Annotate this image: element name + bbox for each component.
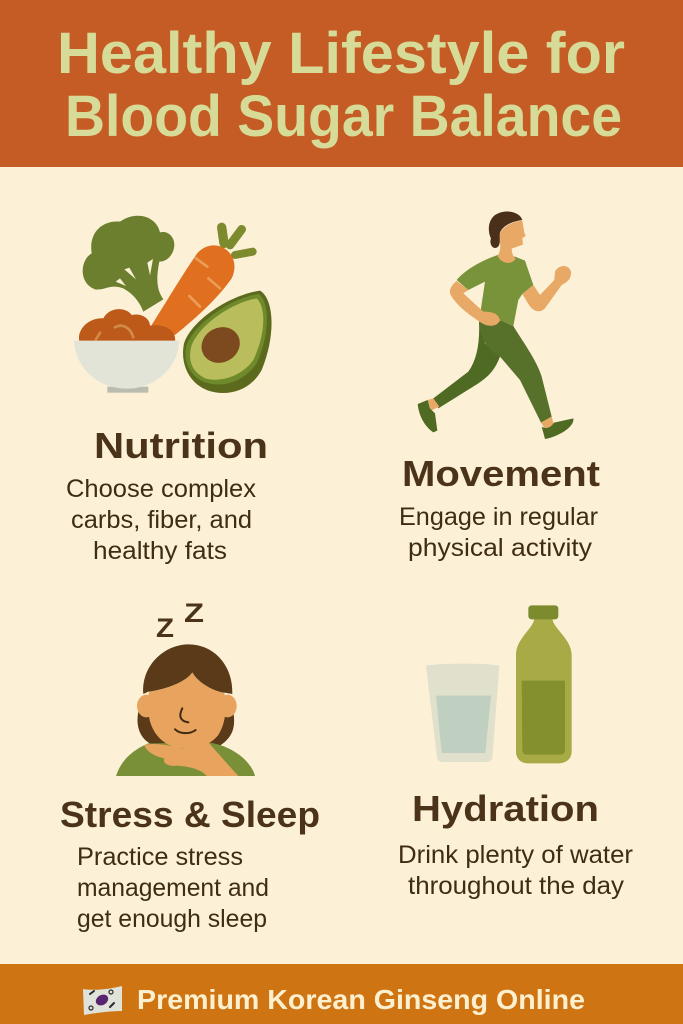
- nose and mouth: [175, 708, 196, 733]
- hair: [489, 211, 522, 248]
- shirt: [457, 255, 533, 326]
- text: Stress & Sleep description: Practice stress: [77, 843, 243, 871]
- icon: sleeping person: [116, 644, 255, 776]
- title banner: [0, 0, 683, 167]
- text: Nutrition description: carbs, fiber, and: [71, 506, 252, 534]
- shoes: [418, 400, 573, 439]
- title: [57, 21, 625, 149]
- icon: healthy food: [74, 216, 272, 393]
- heading: Hydration: Hydration: [412, 788, 599, 829]
- text: Nutrition description: Choose complex: [66, 475, 256, 503]
- heading: Nutrition: Nutrition: [94, 425, 268, 466]
- back arm: [450, 281, 500, 326]
- footer banner: [0, 964, 683, 1024]
- avocado: [183, 291, 272, 393]
- text: Hydration description: [398, 841, 633, 900]
- icon: Korean flag: [83, 986, 122, 1015]
- neck and face: [498, 221, 526, 263]
- text: Movement description: physical activity: [408, 534, 593, 562]
- front leg: [479, 321, 552, 423]
- shoulders: [116, 743, 255, 776]
- broccoli: [83, 216, 174, 312]
- text: Movement description: Engage in regular: [399, 503, 598, 531]
- forward arm: [522, 266, 571, 311]
- sleep letters: Z: [184, 598, 204, 628]
- glass: [426, 664, 499, 762]
- text: Nutrition description: healthy fats: [93, 537, 227, 565]
- ankles: [428, 398, 554, 429]
- carrot: [151, 227, 253, 335]
- icon: water glass and bottle: [426, 605, 572, 763]
- title: Blood Sugar Balance: [65, 84, 622, 149]
- hand: [144, 742, 238, 776]
- heading: Movement: Movement: [402, 453, 600, 494]
- back hair: [137, 712, 234, 746]
- ears: [137, 695, 237, 717]
- brown food: [79, 309, 175, 341]
- bottle: [516, 605, 572, 763]
- heading: Stress & Sleep: Stress & Sleep: [60, 794, 320, 835]
- bowl: [74, 341, 179, 393]
- face: [148, 672, 226, 749]
- sleep letters: Z: [156, 613, 174, 643]
- text: Hydration description: throughout the day: [408, 872, 625, 900]
- text: Stress & Sleep description: management and: [77, 874, 269, 902]
- text: Stress & Sleep description: get enough sleep: [77, 905, 267, 933]
- text: Hydration description: Drink plenty of water: [398, 841, 633, 869]
- back leg: [433, 322, 500, 408]
- text: Movement description: [399, 503, 598, 562]
- title: Healthy Lifestyle for: [57, 21, 625, 86]
- sleep letters: [156, 598, 204, 643]
- icon: runner: [418, 211, 573, 439]
- front hair: [143, 644, 232, 694]
- footer text: Premium Korean Ginseng Online: [137, 984, 585, 1015]
- text: Nutrition description: [66, 475, 256, 565]
- text: Stress & Sleep description: [77, 843, 269, 933]
